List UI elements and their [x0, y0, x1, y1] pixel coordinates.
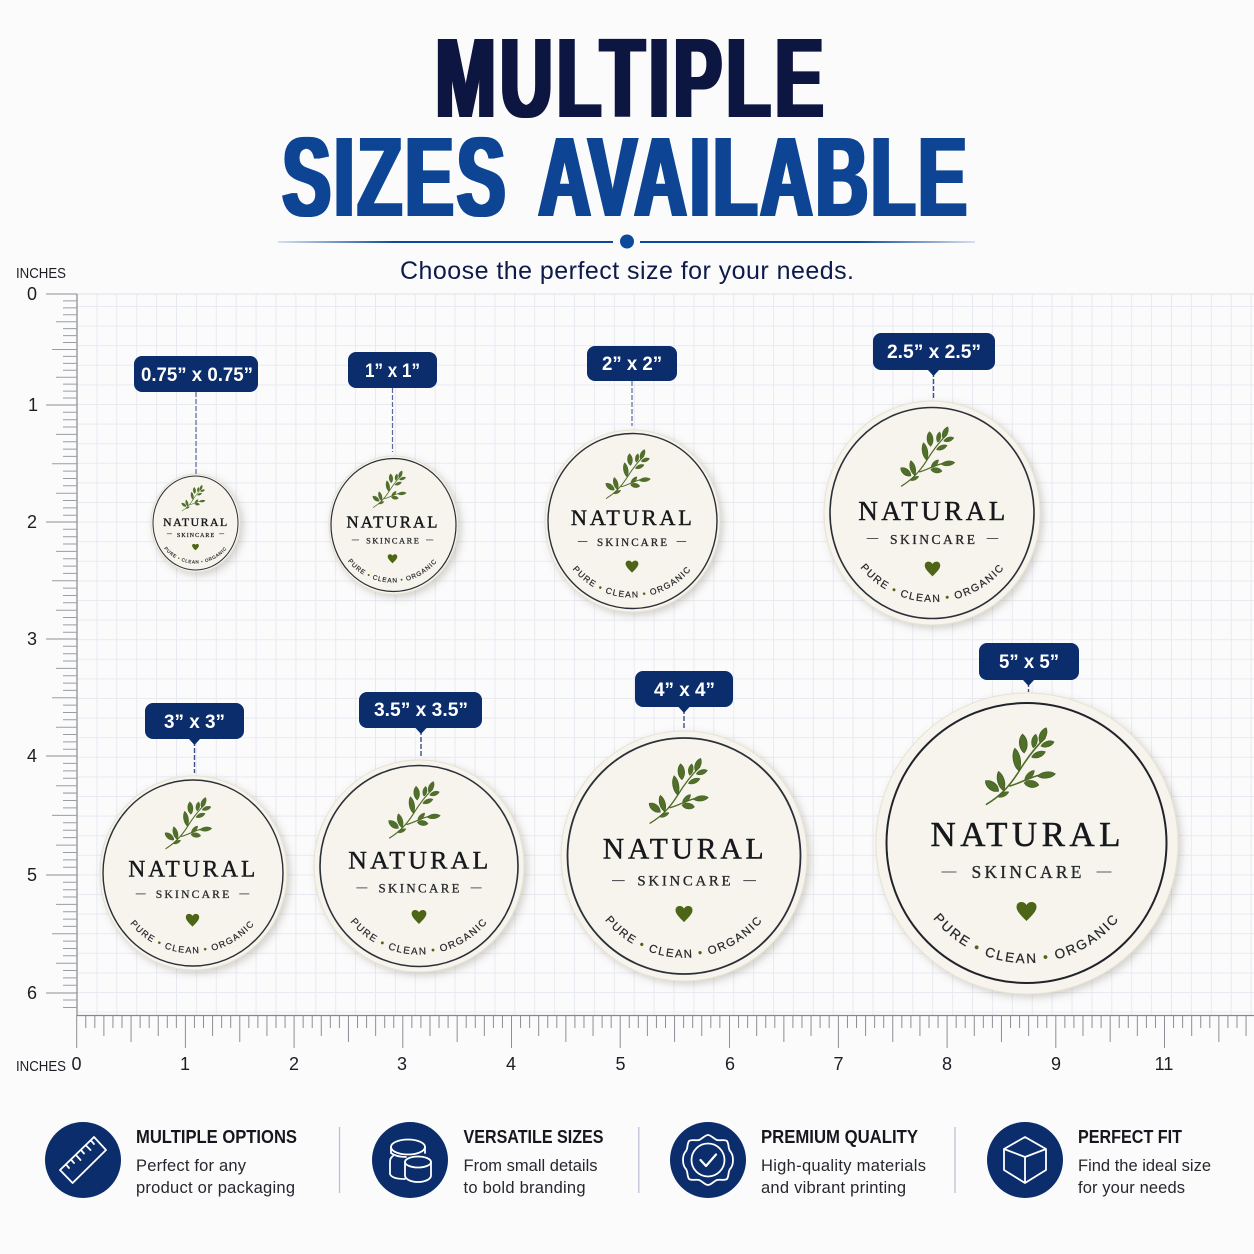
title line: MULTIPLE: MULTIPLE	[436, 16, 823, 142]
vertical inch ruler: 6	[27, 983, 37, 1003]
feature: versatile sizes: VERSATILE SIZES	[464, 1126, 604, 1147]
feature: perfect fit: PERFECT FIT	[1078, 1126, 1183, 1147]
feature: premium quality: PREMIUM QUALITY	[761, 1126, 919, 1147]
sticker: 0.75 inch: PURE • CLEAN • ORGANIC	[164, 546, 226, 564]
size label: 2.5 x 2.5	[873, 333, 995, 398]
vertical inch ruler: 2	[27, 512, 37, 532]
sticker: 3.5 inch: PURE • CLEAN • ORGANIC	[350, 918, 486, 955]
measuring grid	[77, 294, 1254, 1015]
size label: 0.75 x 0.75: 0.75” x 0.75”	[141, 365, 253, 386]
icon: quality badge	[670, 1122, 746, 1198]
sticker: 2.5 inch	[823, 400, 1047, 632]
horizontal inch ruler: INCHES	[16, 1059, 66, 1075]
vertical inch ruler: 5	[27, 865, 37, 885]
size label: 3.5 x 3.5	[359, 692, 482, 756]
size label: 3 x 3: 3” x 3”	[164, 712, 225, 733]
horizontal inch ruler: 7	[833, 1054, 844, 1074]
horizontal inch ruler: 6	[725, 1054, 735, 1074]
horizontal inch ruler: 0	[71, 1054, 82, 1074]
sticker: 1 inch: PURE • CLEAN • ORGANIC	[348, 558, 436, 583]
feature: perfect fit: Find the ideal size	[1078, 1157, 1211, 1175]
sticker: 2 inch: SKINCARE	[597, 537, 667, 549]
sticker: 2.5 inch: NATURAL	[858, 496, 1005, 526]
vertical inch ruler: 4	[27, 746, 37, 766]
size label: 1 x 1: 1” x 1”	[365, 361, 420, 382]
horizontal inch ruler: 11	[1155, 1054, 1173, 1074]
vertical inch ruler	[16, 266, 77, 1015]
size label: 2.5 x 2.5: 2.5” x 2.5”	[887, 342, 981, 363]
feature: versatile sizes	[372, 1122, 604, 1198]
feature: perfect fit	[987, 1122, 1211, 1198]
sticker: 2 inch: NATURAL	[571, 505, 692, 530]
divider	[954, 1127, 956, 1193]
sticker: 3.5 inch	[313, 759, 531, 979]
icon: cube	[987, 1122, 1063, 1198]
sticker: 0.75 inch: SKINCARE	[177, 533, 214, 539]
sticker: 3.5 inch: SKINCARE	[378, 881, 460, 895]
sticker: 2.5 inch: SKINCARE	[890, 532, 975, 547]
sticker: 0.75 inch: NATURAL	[163, 515, 227, 529]
subtitle: Choose the perfect size for your needs.	[400, 257, 854, 285]
icon: jars	[372, 1122, 448, 1198]
horizontal inch ruler: 4	[506, 1054, 516, 1074]
sticker: 2 inch: PURE • CLEAN • ORGANIC	[572, 566, 690, 598]
horizontal inch ruler	[16, 1015, 1254, 1075]
horizontal inch ruler: 1	[180, 1054, 190, 1074]
horizontal inch ruler: 3	[397, 1054, 407, 1074]
title line: SIZES AVAILABLE: AVAILABLE	[538, 115, 967, 241]
sticker: 5 inch: NATURAL	[930, 815, 1120, 854]
size label: 3 x 3	[145, 703, 244, 773]
size label: 0.75 x 0.75	[134, 356, 258, 474]
feature: multiple options: product or packaging	[136, 1179, 295, 1197]
sticker: 4 inch: NATURAL	[603, 834, 764, 866]
size label: 4 x 4	[635, 671, 733, 728]
feature: perfect fit: for your needs	[1078, 1179, 1185, 1197]
vertical inch ruler: 3	[27, 629, 37, 649]
title	[282, 16, 967, 241]
size label: 5 x 5: 5” x 5”	[999, 652, 1059, 673]
size label: 4 x 4: 4” x 4”	[654, 680, 715, 701]
feature: premium quality: High-quality materials	[761, 1157, 926, 1175]
feature: versatile sizes: to bold branding	[464, 1179, 586, 1197]
sticker: 5 inch: PURE • CLEAN • ORGANIC	[934, 912, 1118, 964]
sticker: 4 inch	[560, 730, 814, 988]
horizontal inch ruler: 2	[289, 1054, 299, 1074]
title line: SIZES AVAILABLE: SIZES	[282, 115, 505, 241]
sticker: 1 inch: SKINCARE	[366, 537, 419, 546]
sticker: 5 inch: SKINCARE	[972, 862, 1082, 882]
feature: premium quality: and vibrant printing	[761, 1179, 906, 1197]
horizontal inch ruler: 5	[615, 1054, 626, 1074]
feature: premium quality	[670, 1122, 926, 1198]
horizontal inch ruler: 9	[1051, 1054, 1061, 1074]
size label: 3.5 x 3.5: 3.5” x 3.5”	[374, 700, 468, 721]
icon: ruler	[45, 1122, 121, 1198]
title line: SIZES AVAILABLE	[282, 115, 967, 241]
feature: multiple options: Perfect for any	[136, 1157, 247, 1175]
sticker: 3 inch: SKINCARE	[156, 888, 229, 901]
sticker: 3.5 inch: NATURAL	[348, 846, 488, 875]
size label: 2 x 2: 2” x 2”	[602, 354, 662, 375]
sticker: 4 inch: PURE • CLEAN • ORGANIC	[605, 915, 761, 958]
size label: 1 x 1	[348, 352, 437, 452]
divider	[338, 1127, 340, 1193]
sticker: 2.5 inch: PURE • CLEAN • ORGANIC	[860, 563, 1003, 602]
sticker: 4 inch: SKINCARE	[637, 874, 731, 890]
sticker: 3 inch	[99, 775, 294, 977]
sticker: 3 inch: NATURAL	[128, 857, 255, 883]
sticker: 0.75 inch	[150, 473, 247, 579]
vertical inch ruler: INCHES	[16, 266, 66, 282]
horizontal inch ruler: 8	[942, 1054, 952, 1074]
size label: 2 x 2	[587, 346, 677, 426]
vertical inch ruler: 1	[28, 395, 38, 415]
sticker: 5 inch	[875, 692, 1185, 1001]
divider	[638, 1127, 640, 1193]
sticker: 1 inch: NATURAL	[347, 512, 438, 531]
sticker: 2 inch	[544, 429, 727, 619]
feature: multiple options	[45, 1122, 297, 1198]
feature: multiple options: MULTIPLE OPTIONS	[136, 1126, 297, 1147]
sticker: 3 inch: PURE • CLEAN • ORGANIC	[130, 920, 253, 954]
sticker: 1 inch	[328, 455, 465, 601]
vertical inch ruler: 0	[27, 284, 37, 304]
feature: versatile sizes: From small details	[464, 1157, 598, 1175]
size label: 5 x 5	[979, 643, 1079, 692]
title divider	[278, 234, 975, 248]
